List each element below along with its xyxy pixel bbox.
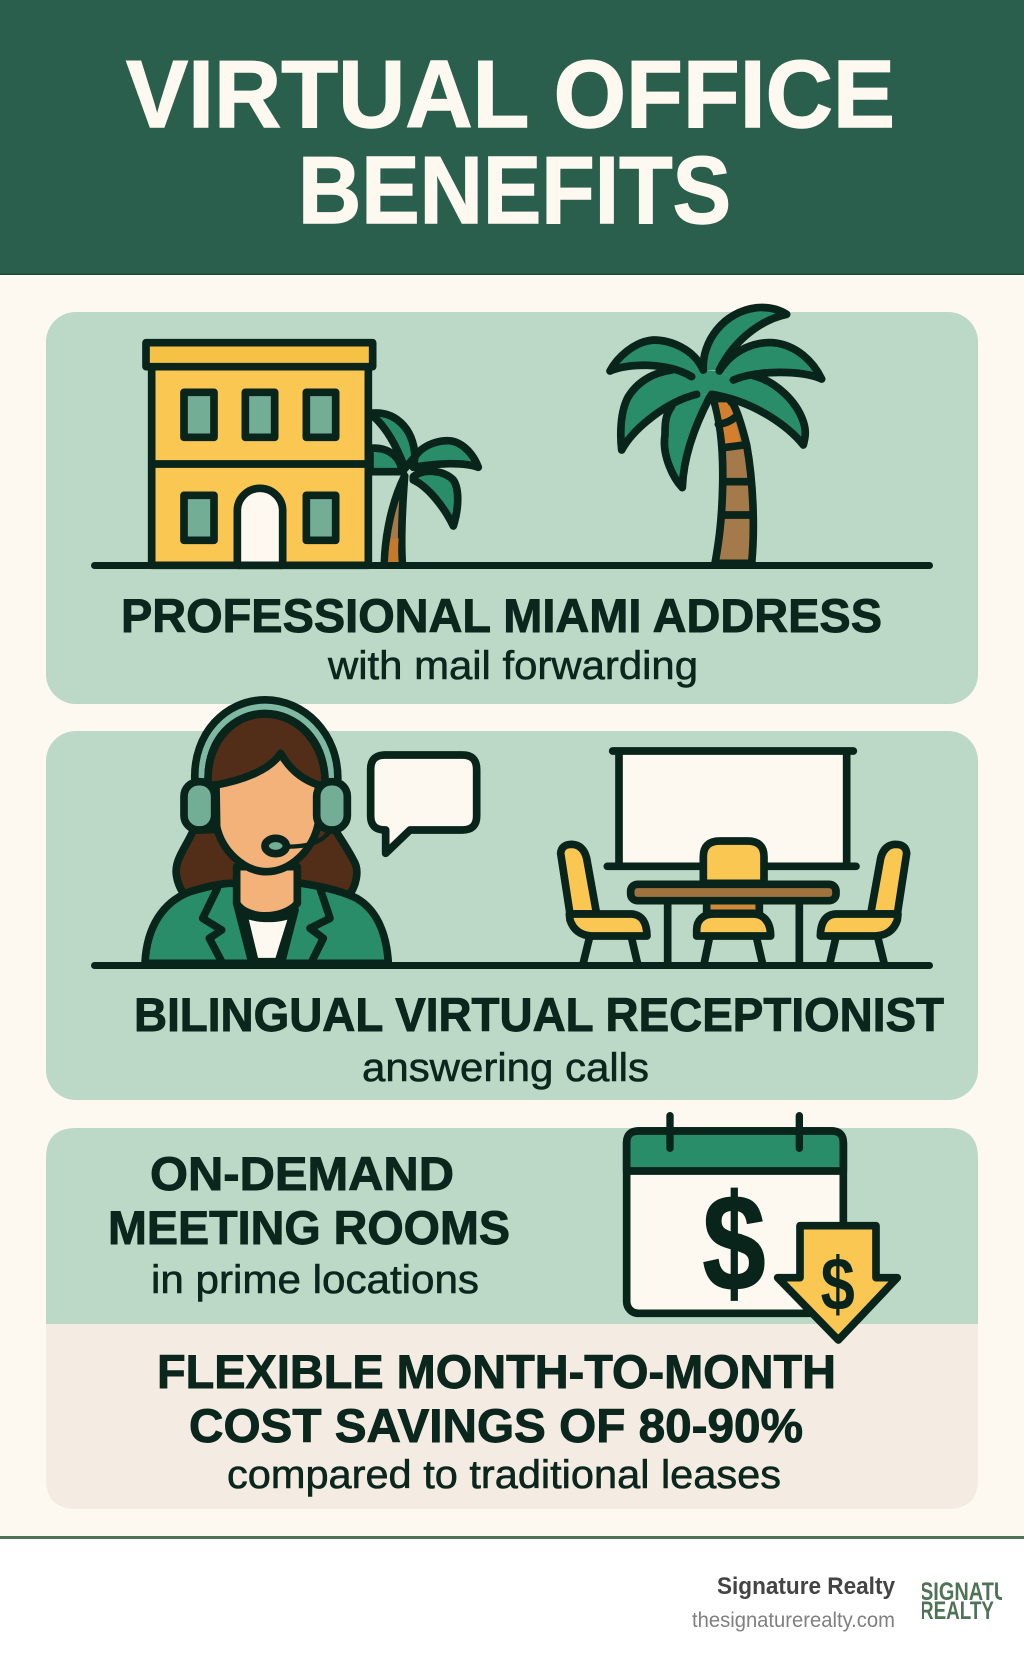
- title: VIRTUAL OFFICE: [126, 41, 895, 148]
- footer logo: [920, 1578, 1024, 1625]
- icon: receptionist: [145, 707, 388, 963]
- subheading: prime locations: in prime locations: [151, 1258, 479, 1302]
- heading: flexible terms and savings: [157, 1346, 836, 1453]
- footer company name: Signature Realty: [717, 1573, 896, 1600]
- heading: flexible terms and savings: FLEXIBLE MONTH-TO-MONTH: [157, 1346, 836, 1399]
- ground line: [91, 962, 933, 969]
- subheading: compared to leases: compared to traditional leases: [227, 1453, 781, 1497]
- subheading: answering calls: answering calls: [362, 1046, 649, 1090]
- heading: meeting rooms: ON-DEMAND: [150, 1148, 454, 1201]
- footer: [0, 1536, 1024, 1666]
- icon: small palm tree: [370, 413, 478, 563]
- icon: building: [146, 343, 373, 565]
- heading: Miami address: PROFESSIONAL MIAMI ADDRESS: [121, 590, 882, 643]
- panel: Miami address: [46, 307, 978, 704]
- footer website: thesignaturerealty.com: [692, 1609, 895, 1632]
- heading: flexible terms and savings: COST SAVINGS OF 80-90%: [189, 1400, 803, 1453]
- heading: receptionist: BILINGUAL VIRTUAL RECEPTIONIST: [134, 989, 944, 1042]
- footer logo: REALTY: [920, 1597, 994, 1625]
- ground line: [91, 562, 933, 569]
- header banner: [0, 0, 1024, 275]
- icon: meeting room: [561, 751, 907, 963]
- icon: calendar with falling cost: [627, 1116, 897, 1340]
- panel: receptionist: [46, 707, 978, 1100]
- title: BENEFITS: [298, 137, 731, 244]
- icon: calendar with falling cost: $: [821, 1242, 855, 1326]
- heading: meeting rooms: MEETING ROOMS: [108, 1202, 510, 1255]
- panel: meeting rooms and savings: [46, 1116, 978, 1509]
- icon: calendar with falling cost: $: [702, 1166, 766, 1319]
- icon: speech bubble: [371, 755, 477, 853]
- title: [126, 41, 895, 244]
- icon: large palm tree: [610, 307, 822, 563]
- subheading: mail forwarding: with mail forwarding: [327, 644, 698, 688]
- heading: meeting rooms: [108, 1148, 510, 1255]
